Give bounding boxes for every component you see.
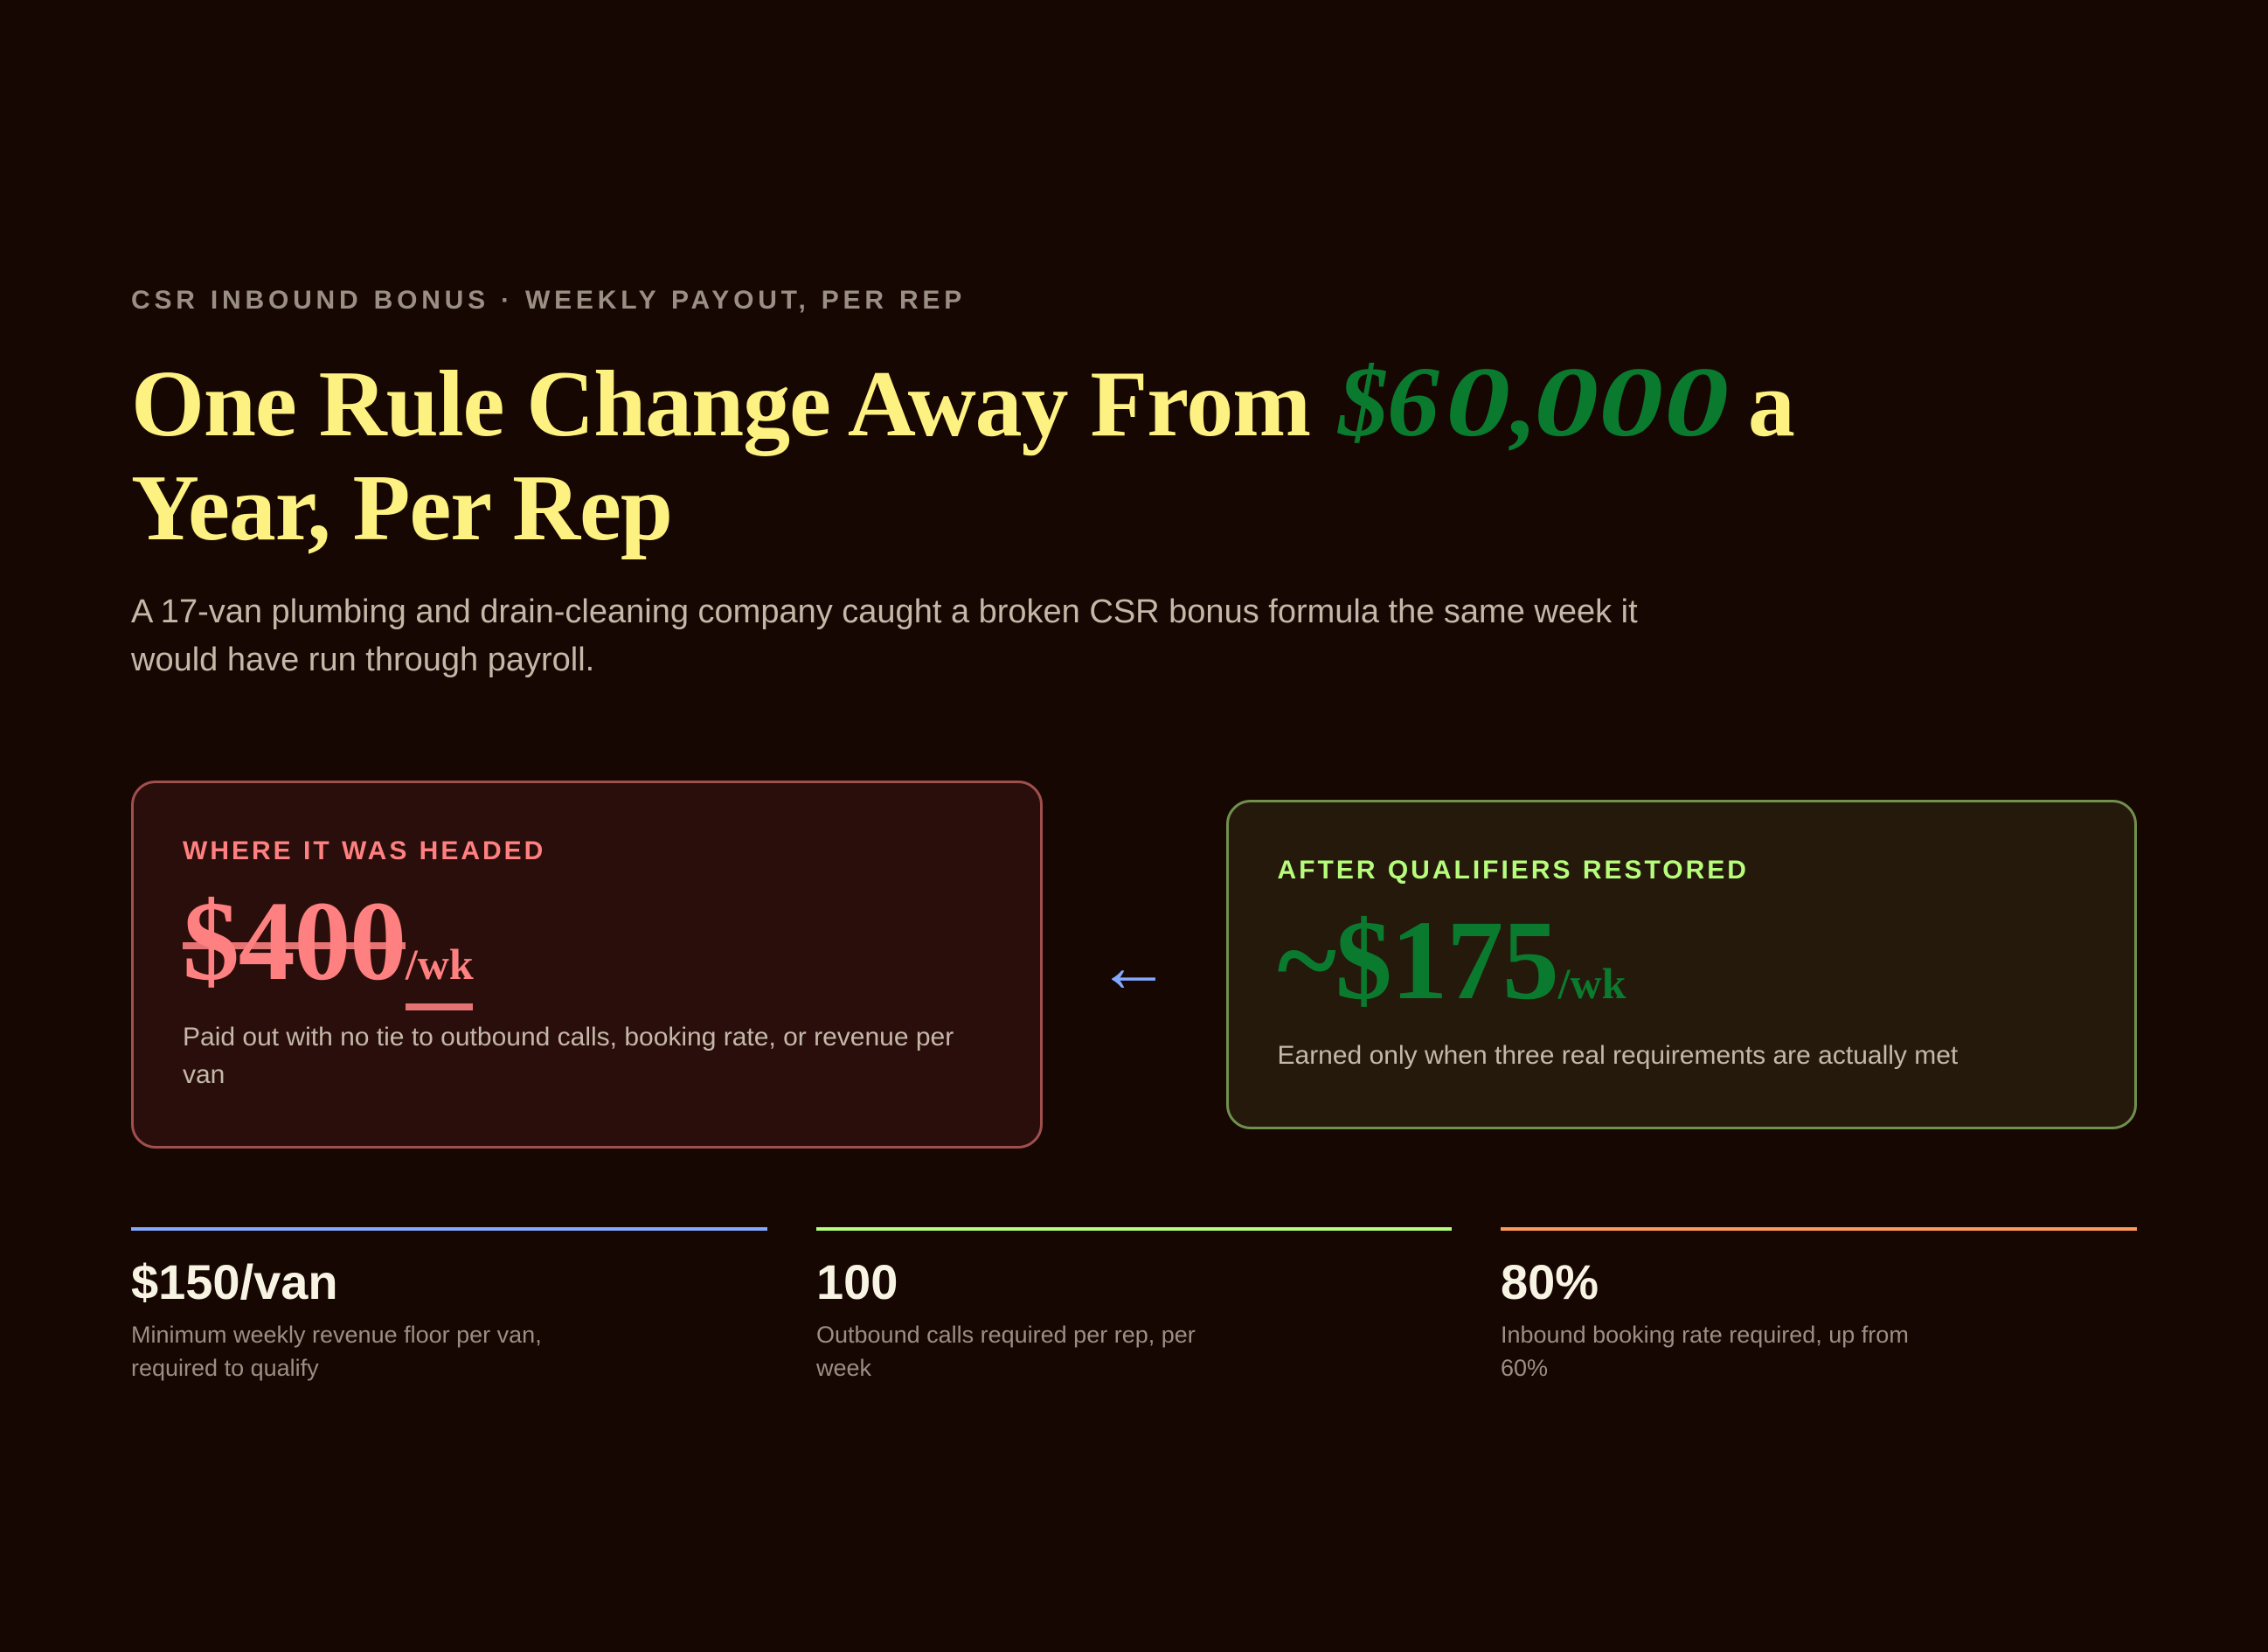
title: 0 [1664, 346, 1729, 456]
panel: after qualifiers restored [1226, 800, 2137, 1129]
stat: outbound calls [816, 1227, 1452, 1381]
stat: booking rate [1501, 1227, 2137, 1381]
title: $ [1338, 346, 1388, 456]
old price: $400/wk [183, 878, 474, 1004]
stat bar [1501, 1227, 2137, 1231]
stat value: 100 [816, 1254, 898, 1309]
title: 0 [1534, 346, 1599, 456]
stat label: 60% [1501, 1355, 1548, 1381]
strikethrough [183, 942, 406, 949]
arrow: ← [1097, 925, 1170, 1007]
eyebrow: CSR INBOUND BONUS · WEEKLY PAYOUT, PER REP [131, 286, 966, 315]
title: 0 [1446, 346, 1511, 456]
stat label: week [816, 1355, 871, 1381]
stat label [1501, 1322, 1909, 1381]
subtitle [131, 593, 1638, 678]
stat label [131, 1322, 542, 1381]
title: Year, Per Rep [131, 456, 672, 560]
new price: ~$175/wk [1278, 898, 1626, 1024]
underline [406, 1003, 473, 1010]
panel description: van [183, 1060, 225, 1089]
stat value: $150/van [131, 1254, 338, 1309]
stat label [816, 1322, 1196, 1381]
panel description: Paid out with no tie to outbound calls, booking rate, or revenue per [183, 1023, 954, 1052]
stat bar [131, 1227, 767, 1231]
panel label: AFTER QUALIFIERS RESTORED [1278, 856, 1749, 885]
stat: revenue floor [131, 1227, 767, 1381]
stat bar [816, 1227, 1452, 1231]
stat label: Outbound calls required per rep, per [816, 1322, 1196, 1348]
title: , [1511, 346, 1537, 456]
subtitle: would have run through payroll. [131, 642, 594, 678]
stat label: required to qualify [131, 1355, 319, 1381]
panel: where it was headed [131, 781, 1042, 1149]
stat value: 80% [1501, 1254, 1599, 1309]
title: 0 [1599, 346, 1664, 456]
panel description [183, 1023, 954, 1089]
panel label: WHERE IT WAS HEADED [183, 836, 545, 865]
panel description: Earned only when three real requirements are actually met [1278, 1041, 1958, 1070]
title: 6 [1387, 346, 1439, 456]
title: One Rule Change Away From a [131, 352, 1794, 456]
title [131, 346, 1794, 560]
subtitle: A 17-van plumbing and drain-cleaning company caught a broken CSR bonus formula the same week it [131, 593, 1638, 630]
stat label: Minimum weekly revenue floor per van, [131, 1322, 542, 1348]
stat label: Inbound booking rate required, up from [1501, 1322, 1909, 1348]
